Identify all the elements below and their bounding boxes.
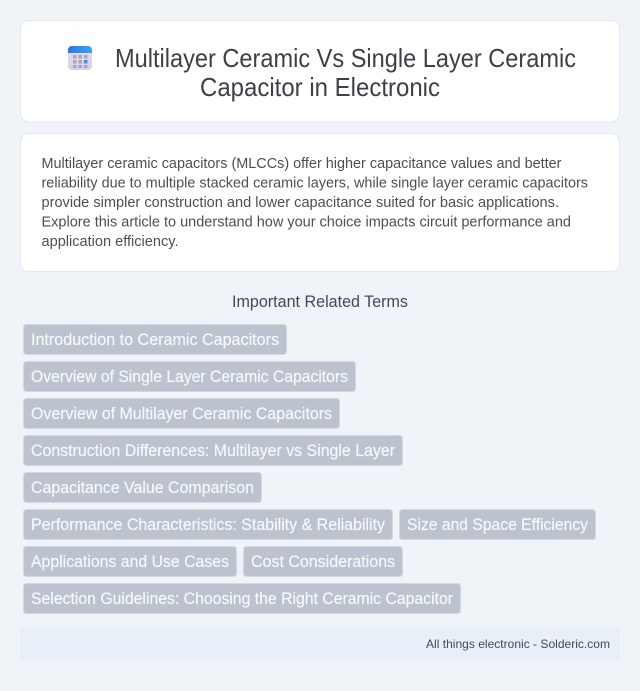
text block: description: provide simpler construction and lower capacitance suited for basic applications. — [42, 195, 559, 211]
tag: cost: Cost Considerations — [251, 553, 395, 571]
panel: description card — [20, 134, 620, 272]
tag: selection guidelines — [24, 584, 460, 614]
tag: performance characteristics: Performance Characteristics: Stability & Reliability — [31, 516, 386, 534]
tag: multilayer overview — [24, 398, 340, 428]
tag: construction differences — [24, 436, 402, 466]
text block: description: reliability due to multiple stacked ceramic layers, while single layer ceramic capacitors — [42, 176, 588, 192]
tag: construction differences: Construction Differences: Multilayer vs Single Layer — [31, 442, 396, 460]
tag: size and space: Size and Space Efficiency — [407, 516, 589, 534]
text block: description — [42, 156, 588, 250]
text block: description: Explore this article to understand how your choice impacts circuit performance and — [42, 214, 571, 230]
tag: size and space — [400, 510, 596, 540]
text block: description: Multilayer ceramic capacitors (MLCCs) offer higher capacitance values and better — [42, 156, 562, 172]
tag: capacitance comparison — [24, 472, 262, 502]
tag: introduction: Introduction to Ceramic Capacitors — [31, 331, 279, 349]
tag: applications: Applications and Use Cases — [31, 553, 229, 571]
title: Multilayer Ceramic Vs Single Layer Ceramic — [115, 45, 576, 73]
footer — [20, 627, 620, 661]
tag: single layer overview — [24, 362, 356, 392]
tag: selection guidelines: Selection Guidelines: Choosing the Right Ceramic Capacitor — [31, 590, 454, 608]
tag: applications — [24, 546, 236, 576]
title: Capacitor in Electronic — [200, 74, 440, 102]
text block: description: application efficiency. — [42, 234, 178, 250]
footer: All things electronic - Solderic.com — [426, 637, 610, 651]
heading: important related terms: Important Related Terms — [232, 293, 408, 311]
tag: performance characteristics — [24, 510, 392, 540]
tag: multilayer overview: Overview of Multilayer Ceramic Capacitors — [31, 405, 332, 423]
tag: capacitance comparison: Capacitance Value Comparison — [31, 479, 254, 497]
tag: cost — [244, 546, 402, 576]
icon: calendar — [68, 46, 92, 70]
panel: header card — [20, 20, 620, 122]
tag: single layer overview: Overview of Single Layer Ceramic Capacitors — [31, 368, 348, 386]
title — [115, 45, 576, 102]
tag: introduction — [24, 324, 286, 354]
